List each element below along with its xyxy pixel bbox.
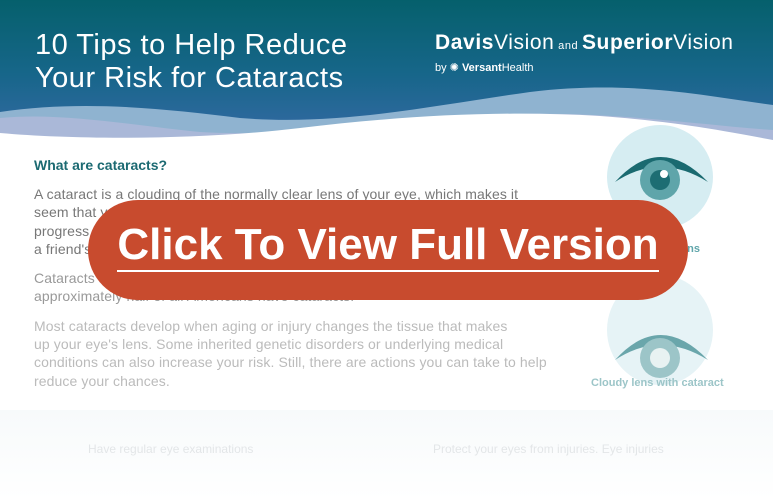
- heading: what are cataracts: What are cataracts?: [34, 157, 167, 173]
- intro text: conditions can also increase your risk. Still, there are actions you can take to help: [34, 354, 547, 370]
- intro text: Cataracts are very common. By age 80,: [34, 270, 284, 286]
- eye illustration: clear lens: [607, 125, 713, 252]
- intro text: approximately half of all Americans have cataracts.: [34, 288, 354, 304]
- faded tips section: [0, 410, 773, 500]
- eye illustration: cloudy lens: [591, 278, 724, 389]
- intro text: progress, it becomes harder to read, drive at night, or see: [34, 223, 396, 239]
- logo: [435, 31, 734, 74]
- eye illustration: cloudy lens: Cloudy lens with cataract: [591, 377, 724, 389]
- logo: by ✺ VersantHealth: [435, 62, 534, 74]
- call to action button: Click To View Full Version: [117, 220, 659, 269]
- intro text: up your eye's lens. Some inherited genetic disorders or underlying medical: [34, 336, 503, 352]
- header background with waves: [0, 0, 773, 140]
- title: Your Risk for Cataracts: [35, 62, 344, 94]
- title: 10 Tips to Help Reduce: [35, 29, 347, 61]
- intro text: [34, 186, 547, 389]
- title: [35, 29, 347, 94]
- logo: DavisVision and SuperiorVision: [435, 31, 734, 54]
- faded tips section: Have regular eye examinations: [88, 442, 253, 456]
- intro text: reduce your chances.: [34, 373, 170, 389]
- faded tips section: Protect your eyes from injuries. Eye injuries: [433, 442, 664, 456]
- intro text: a friend's face.: [34, 241, 126, 257]
- intro text: A cataract is a clouding of the normally clear lens of your eye, which makes it: [34, 186, 518, 202]
- intro text: Most cataracts develop when aging or injury changes the tissue that makes: [34, 318, 507, 334]
- intro text: seem that you are looking through a foggy window. As cataracts: [34, 204, 436, 220]
- call to action button: [88, 200, 688, 300]
